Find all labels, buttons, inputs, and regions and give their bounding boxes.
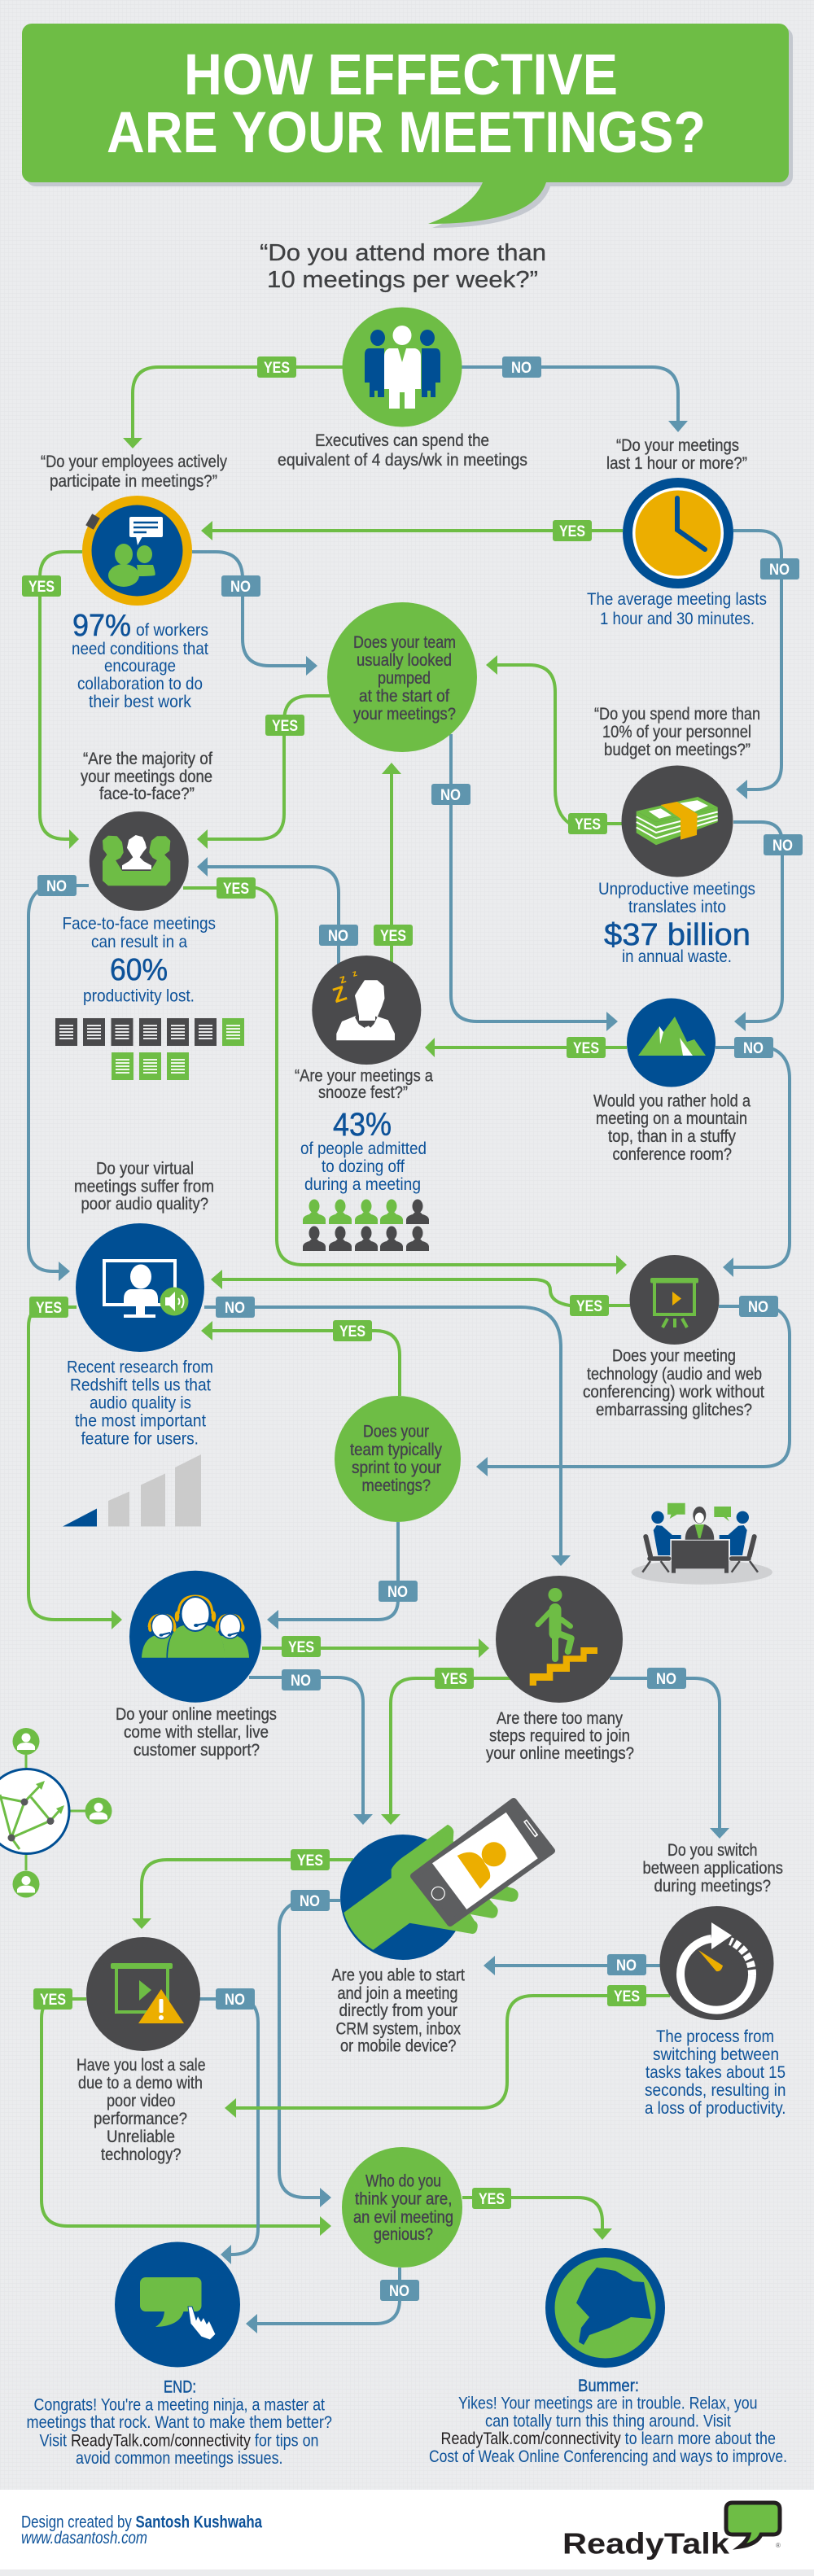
connector: switch yes (225, 1985, 670, 2118)
connector: participate yes (22, 552, 82, 849)
stat: 43 percent: of people admitted (300, 1139, 427, 1158)
designer credit: Design created by Santosh Kushwaha (21, 2513, 262, 2531)
connector: snooze yes: YES (380, 928, 406, 945)
icon: hand holding phone (340, 1801, 552, 1960)
question bubble: pumped: your meetings? (353, 705, 456, 724)
text: switching tasks: The process from (656, 2027, 774, 2046)
icon: sleeping person: z (338, 972, 348, 986)
stat: 43 percent (300, 1107, 427, 1194)
connector: clock no: NO (769, 562, 790, 579)
connector: switch no (484, 1954, 660, 1975)
question: meeting technology: conferencing) work without (583, 1383, 764, 1402)
question bubble: pumped: pumped (378, 669, 431, 688)
text: switching tasks: seconds, resulting in (645, 2081, 786, 2100)
connector: technology no (476, 1296, 790, 1476)
question: mountain top: Would you rather hold a (593, 1092, 751, 1110)
icon: switching gauge (659, 1906, 773, 2020)
question: customer support: come with stellar, live (124, 1723, 269, 1742)
connector: sprint no (267, 1522, 418, 1629)
icon: customer support headsets (129, 1571, 261, 1703)
stat: 97 percent (72, 609, 208, 711)
pictogram: people 43 percent (303, 1200, 429, 1251)
text: switching tasks (645, 2027, 786, 2118)
question: face-to-face: “Are the majority of (83, 750, 212, 768)
connector: mountain yes (425, 1037, 627, 1058)
question: too many steps: steps required to join (489, 1727, 630, 1745)
connector: lost sale yes: YES (40, 1992, 66, 2009)
question bubble: sprint: Does your (363, 1423, 429, 1441)
connector: lost sale no (199, 1988, 258, 2264)
question: employees participate (41, 453, 227, 491)
connector: money yes: YES (575, 816, 601, 833)
connector: money no (733, 822, 803, 1031)
connector: lost sale no: NO (225, 1992, 245, 2009)
text: average meeting: The average meeting lasts (587, 590, 767, 609)
question bubble: pumped: Does your team (353, 633, 456, 652)
question: meeting length: last 1 hour or more?” (606, 454, 747, 473)
question: mountain top: meeting on a mountain (596, 1109, 747, 1128)
question: mountain top (593, 1092, 751, 1164)
stat: 60 percent: productivity lost. (83, 986, 195, 1006)
question: virtual audio: Do your virtual (96, 1159, 194, 1179)
opening question: “Do you attend more than (260, 240, 546, 266)
question bubble: evil genius: Who do you (365, 2171, 441, 2191)
stat: 97 percent: encourage (104, 657, 176, 676)
ReadyTalk logo (562, 2503, 781, 2561)
illustration: people at table (632, 1503, 772, 1585)
question: face-to-face (81, 750, 212, 803)
question: lost sale (77, 2056, 205, 2164)
connector: technology yes (211, 1270, 630, 1316)
question: personnel budget: “Do you spend more than (594, 705, 760, 724)
question: meeting technology: embarrassing glitches? (596, 1401, 752, 1419)
text: switching tasks: a loss of productivity. (645, 2099, 786, 2118)
question: mountain top: conference room? (612, 1145, 732, 1164)
connector: evil genius yes (462, 2188, 612, 2240)
stat: 37 billion: Unproductive meetings (598, 880, 755, 899)
connector: face-to-face no: NO (46, 878, 67, 895)
stat: 97 percent: 97% (72, 609, 131, 643)
question bubble: pumped: at the start of (359, 687, 449, 706)
ReadyTalk logo: ReadyTalk (562, 2526, 730, 2561)
connector: face-to-face no (28, 875, 89, 1281)
text: bummer outcome (429, 2377, 787, 2466)
connector: evil genius no: NO (389, 2283, 409, 2300)
connector: audio no (204, 1297, 571, 1566)
stat: 43 percent: 43% (333, 1107, 392, 1143)
stat: 43 percent: during a meeting (304, 1175, 421, 1194)
icon: sleeping person: z (351, 969, 359, 979)
question: CRM start: Are you able to start (332, 1966, 465, 1984)
question: snooze fest: “Are your meetings a (295, 1066, 433, 1086)
connector: executives yes (123, 356, 343, 448)
question: mountain top: top, than in a stuffy (608, 1127, 736, 1146)
question: virtual audio: poor audio quality? (81, 1195, 208, 1214)
designer credit (21, 2513, 262, 2548)
question: lost sale: due to a demo with (78, 2074, 203, 2093)
connector: clock no (733, 531, 799, 799)
text: audio research: the most important (75, 1411, 206, 1431)
question bubble: evil genius: think your are, (355, 2189, 453, 2209)
question: meeting technology: Does your meeting (612, 1346, 736, 1366)
icon: thumbs down (545, 2248, 665, 2368)
text: bummer outcome: Bummer: (578, 2377, 639, 2395)
connector: face-to-face yes (183, 877, 627, 1275)
text: audio research: Redshift tells us that (70, 1375, 211, 1395)
stat: 60 percent (62, 915, 216, 1006)
icon: presentation screen (630, 1255, 720, 1345)
stat: 97 percent: need conditions that (72, 640, 208, 658)
text: executives fact (278, 431, 527, 470)
icon: face-to-face people (90, 811, 189, 911)
opening question: 10 meetings per week?” (267, 267, 538, 293)
question bubble: evil genius: an evil meeting (353, 2208, 453, 2227)
text: bummer outcome: can totally turn this thing around. Visit (485, 2412, 731, 2430)
icon: mountain (627, 998, 716, 1087)
connector: participate no: NO (230, 579, 251, 596)
question: lost sale: Unreliable (107, 2128, 175, 2146)
text: audio research: audio quality is (90, 1393, 191, 1413)
stat: 37 billion: $37 billion (604, 918, 751, 952)
connector: phone yes (132, 1849, 353, 1929)
question bubble: evil genius (342, 2147, 462, 2268)
question: face-to-face: face-to-face?” (99, 785, 195, 803)
question: too many steps: your online meetings? (486, 1744, 634, 1763)
question: CRM start (332, 1966, 465, 2056)
connector: support yes (262, 1636, 489, 1658)
text: end outcome: Congrats! You're a meeting ninja, a master at (34, 2396, 325, 2414)
title banner: HOW EFFECTIVE (184, 43, 618, 107)
connector: pumped yes: YES (272, 718, 298, 735)
icon: collaboration ring (82, 496, 192, 606)
question: lost sale: poor video (107, 2092, 176, 2110)
question: CRM start: directly from your (339, 2001, 457, 2020)
text: average meeting (587, 590, 767, 628)
stat: 60 percent: 60% (110, 953, 168, 987)
footer (0, 2490, 814, 2569)
question: lost sale: technology? (101, 2145, 181, 2164)
connector: participate no (192, 552, 317, 676)
question: switch applications: between applications (643, 1859, 783, 1878)
icon: money stack (622, 765, 733, 877)
connector: phone yes: YES (297, 1852, 323, 1870)
text: end outcome: meetings that rock. Want to make them better? (26, 2413, 332, 2432)
connector: support no (249, 1669, 373, 1825)
question: CRM start: CRM system, inbox (335, 2020, 461, 2038)
question: customer support: Do your online meetings (116, 1705, 277, 1724)
connector: stairs no (610, 1668, 729, 1839)
ReadyTalk logo: ® (776, 2542, 781, 2549)
icon: clock (623, 478, 733, 588)
pictogram: documents 60 percent (55, 1018, 244, 1080)
question bubble: pumped: usually looked (357, 651, 452, 670)
connector: clock yes: YES (559, 523, 585, 540)
question: lost sale: Have you lost a sale (77, 2056, 205, 2075)
question: switch applications: Do you switch (667, 1841, 757, 1860)
text: executives fact: equivalent of 4 days/wk in meetings (278, 451, 527, 470)
connector: money yes (486, 655, 622, 834)
connector: pumped yes (197, 696, 330, 849)
icon: figure climbing stairs (496, 1576, 623, 1703)
connector: switch yes: YES (614, 1988, 640, 2005)
connector: audio no: NO (225, 1300, 245, 1317)
text: audio research: Recent research from (67, 1358, 213, 1377)
text: switching tasks: tasks takes about 15 (646, 2063, 786, 2082)
connector: technology yes: YES (576, 1298, 602, 1315)
connector: executives no (462, 356, 688, 432)
connector: executives no: NO (511, 360, 532, 377)
connector: technology no: NO (748, 1299, 768, 1316)
connector: pumped no: NO (440, 787, 461, 804)
connector: snooze yes (374, 763, 413, 969)
question bubble: pumped (327, 602, 477, 752)
icon: end speech bubble and hand (115, 2241, 240, 2367)
question: employees participate: “Do your employees actively (41, 453, 227, 471)
connector: face-to-face yes: YES (223, 881, 249, 898)
stat: 97 percent: their best work (89, 693, 191, 711)
question bubble: sprint: meetings? (361, 1476, 431, 1495)
question: CRM start: and join a meeting (337, 1984, 457, 2003)
question: meeting technology: technology (audio and web (587, 1365, 762, 1384)
icon: sleeping person (312, 956, 421, 1065)
stat: 60 percent: Face-to-face meetings (62, 915, 216, 933)
connector: evil genius yes: YES (479, 2191, 505, 2208)
question: switch applications: during meetings? (654, 1877, 771, 1896)
connector: sprint yes: YES (339, 1323, 365, 1340)
connector: support yes: YES (288, 1639, 314, 1656)
illustration: user network (0, 1728, 112, 1898)
connector: stairs yes (381, 1668, 510, 1825)
title banner: ARE YOUR MEETINGS? (107, 101, 706, 165)
connector: phone no (279, 1890, 340, 2207)
question: personnel budget: 10% of your personnel (602, 723, 751, 741)
text: executives fact: Executives can spend the (315, 431, 489, 450)
icon: video monitor with speaker (76, 1223, 204, 1352)
question: personnel budget (594, 705, 760, 759)
question: personnel budget: budget on meetings?” (604, 741, 751, 759)
text: audio research (67, 1358, 213, 1449)
question: too many steps: Are there too many (497, 1709, 623, 1728)
question: customer support (116, 1705, 277, 1760)
designer credit: www.dasantosh.com (21, 2529, 147, 2548)
question: virtual audio (74, 1159, 214, 1214)
stat: 37 billion: in annual waste. (622, 947, 732, 966)
question bubble: sprint: team typically (350, 1441, 442, 1459)
icon: executives (342, 308, 462, 426)
question bubble: sprint: sprint to your (352, 1459, 441, 1477)
chart: signal bars (63, 1454, 201, 1527)
connector: support no: NO (291, 1673, 311, 1690)
question bubble: sprint (335, 1396, 461, 1522)
question: face-to-face: your meetings done (81, 768, 212, 786)
stat: 97 percent: collaboration to do (77, 675, 203, 693)
connector: snooze no: NO (328, 928, 348, 945)
connector: phone no: NO (300, 1893, 320, 1910)
question: employees participate: participate in meetings?” (50, 472, 217, 491)
connector: clock yes (201, 520, 623, 541)
icon: video warning (86, 1937, 200, 2051)
connector: participate yes: YES (28, 579, 55, 596)
question bubble: evil genius: genious? (374, 2225, 433, 2244)
connector: executives yes: YES (264, 360, 290, 377)
connector: switch no: NO (616, 1957, 637, 1975)
text: audio research: feature for users. (81, 1429, 199, 1449)
stat: 37 billion: translates into (628, 898, 726, 916)
connector: evil genius no (246, 2268, 419, 2333)
text: end outcome (26, 2378, 332, 2468)
text: end outcome: avoid common meetings issues. (76, 2449, 283, 2468)
connector: pumped no (431, 734, 618, 1031)
stat: 60 percent: can result in a (91, 933, 187, 951)
stat: 43 percent: to dozing off (322, 1157, 405, 1176)
text: average meeting: 1 hour and 30 minutes. (600, 610, 755, 628)
connector: audio yes (28, 1297, 122, 1629)
question: switch applications (643, 1841, 783, 1896)
text: end outcome: END: (164, 2378, 196, 2396)
connector: mountain yes: YES (573, 1040, 599, 1057)
connector: money no: NO (772, 838, 793, 855)
connector: audio yes: YES (36, 1300, 62, 1317)
connector: lost sale yes (33, 1988, 331, 2236)
connector: sprint no: NO (387, 1584, 408, 1601)
opening question (260, 240, 546, 293)
text: end outcome: Visit ReadyTalk.com/connectivity for tips on (39, 2432, 319, 2450)
question: virtual audio: meetings suffer from (74, 1177, 214, 1196)
question: meeting length: “Do your meetings (616, 436, 739, 455)
question: customer support: customer support? (133, 1741, 260, 1760)
connector: stairs no: NO (656, 1671, 676, 1688)
stat: 97 percent: of workers (136, 621, 208, 640)
text: switching tasks: switching between (653, 2045, 779, 2064)
connector: snooze no (197, 857, 358, 969)
connector: stairs yes: YES (441, 1671, 467, 1688)
stat: 37 billion (598, 880, 755, 966)
text: bummer outcome: ReadyTalk.com/connectivity to learn more about the (441, 2429, 776, 2448)
text: bummer outcome: Yikes! Your meetings are in trouble. Relax, you (458, 2394, 757, 2412)
connector: mountain no: NO (743, 1040, 764, 1057)
connector: mountain no (716, 1037, 790, 1277)
question: CRM start: or mobile device? (340, 2036, 456, 2056)
question: too many steps (486, 1709, 634, 1763)
icon: sleeping person: Z (330, 981, 349, 1008)
question: meeting technology (583, 1346, 764, 1419)
question: lost sale: performance? (94, 2110, 187, 2128)
title banner (22, 24, 793, 228)
connector: sprint yes (201, 1320, 400, 1396)
question: snooze fest (295, 1066, 433, 1102)
question: meeting length (606, 436, 747, 473)
question: snooze fest: snooze fest?” (318, 1083, 408, 1102)
